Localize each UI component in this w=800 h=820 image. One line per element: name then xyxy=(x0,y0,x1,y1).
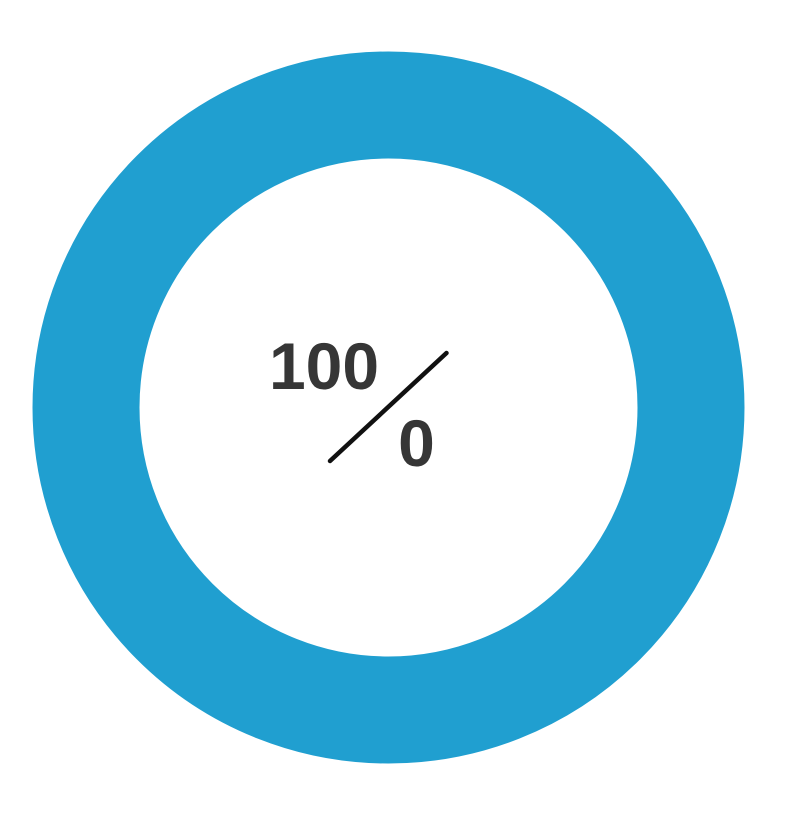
diagonal divider xyxy=(330,353,446,461)
center label: 100 over 0 xyxy=(269,329,446,480)
value: 100: 100 xyxy=(269,329,379,403)
donut ring: 100 percent xyxy=(86,105,691,710)
value: 0: 0 xyxy=(398,406,435,480)
